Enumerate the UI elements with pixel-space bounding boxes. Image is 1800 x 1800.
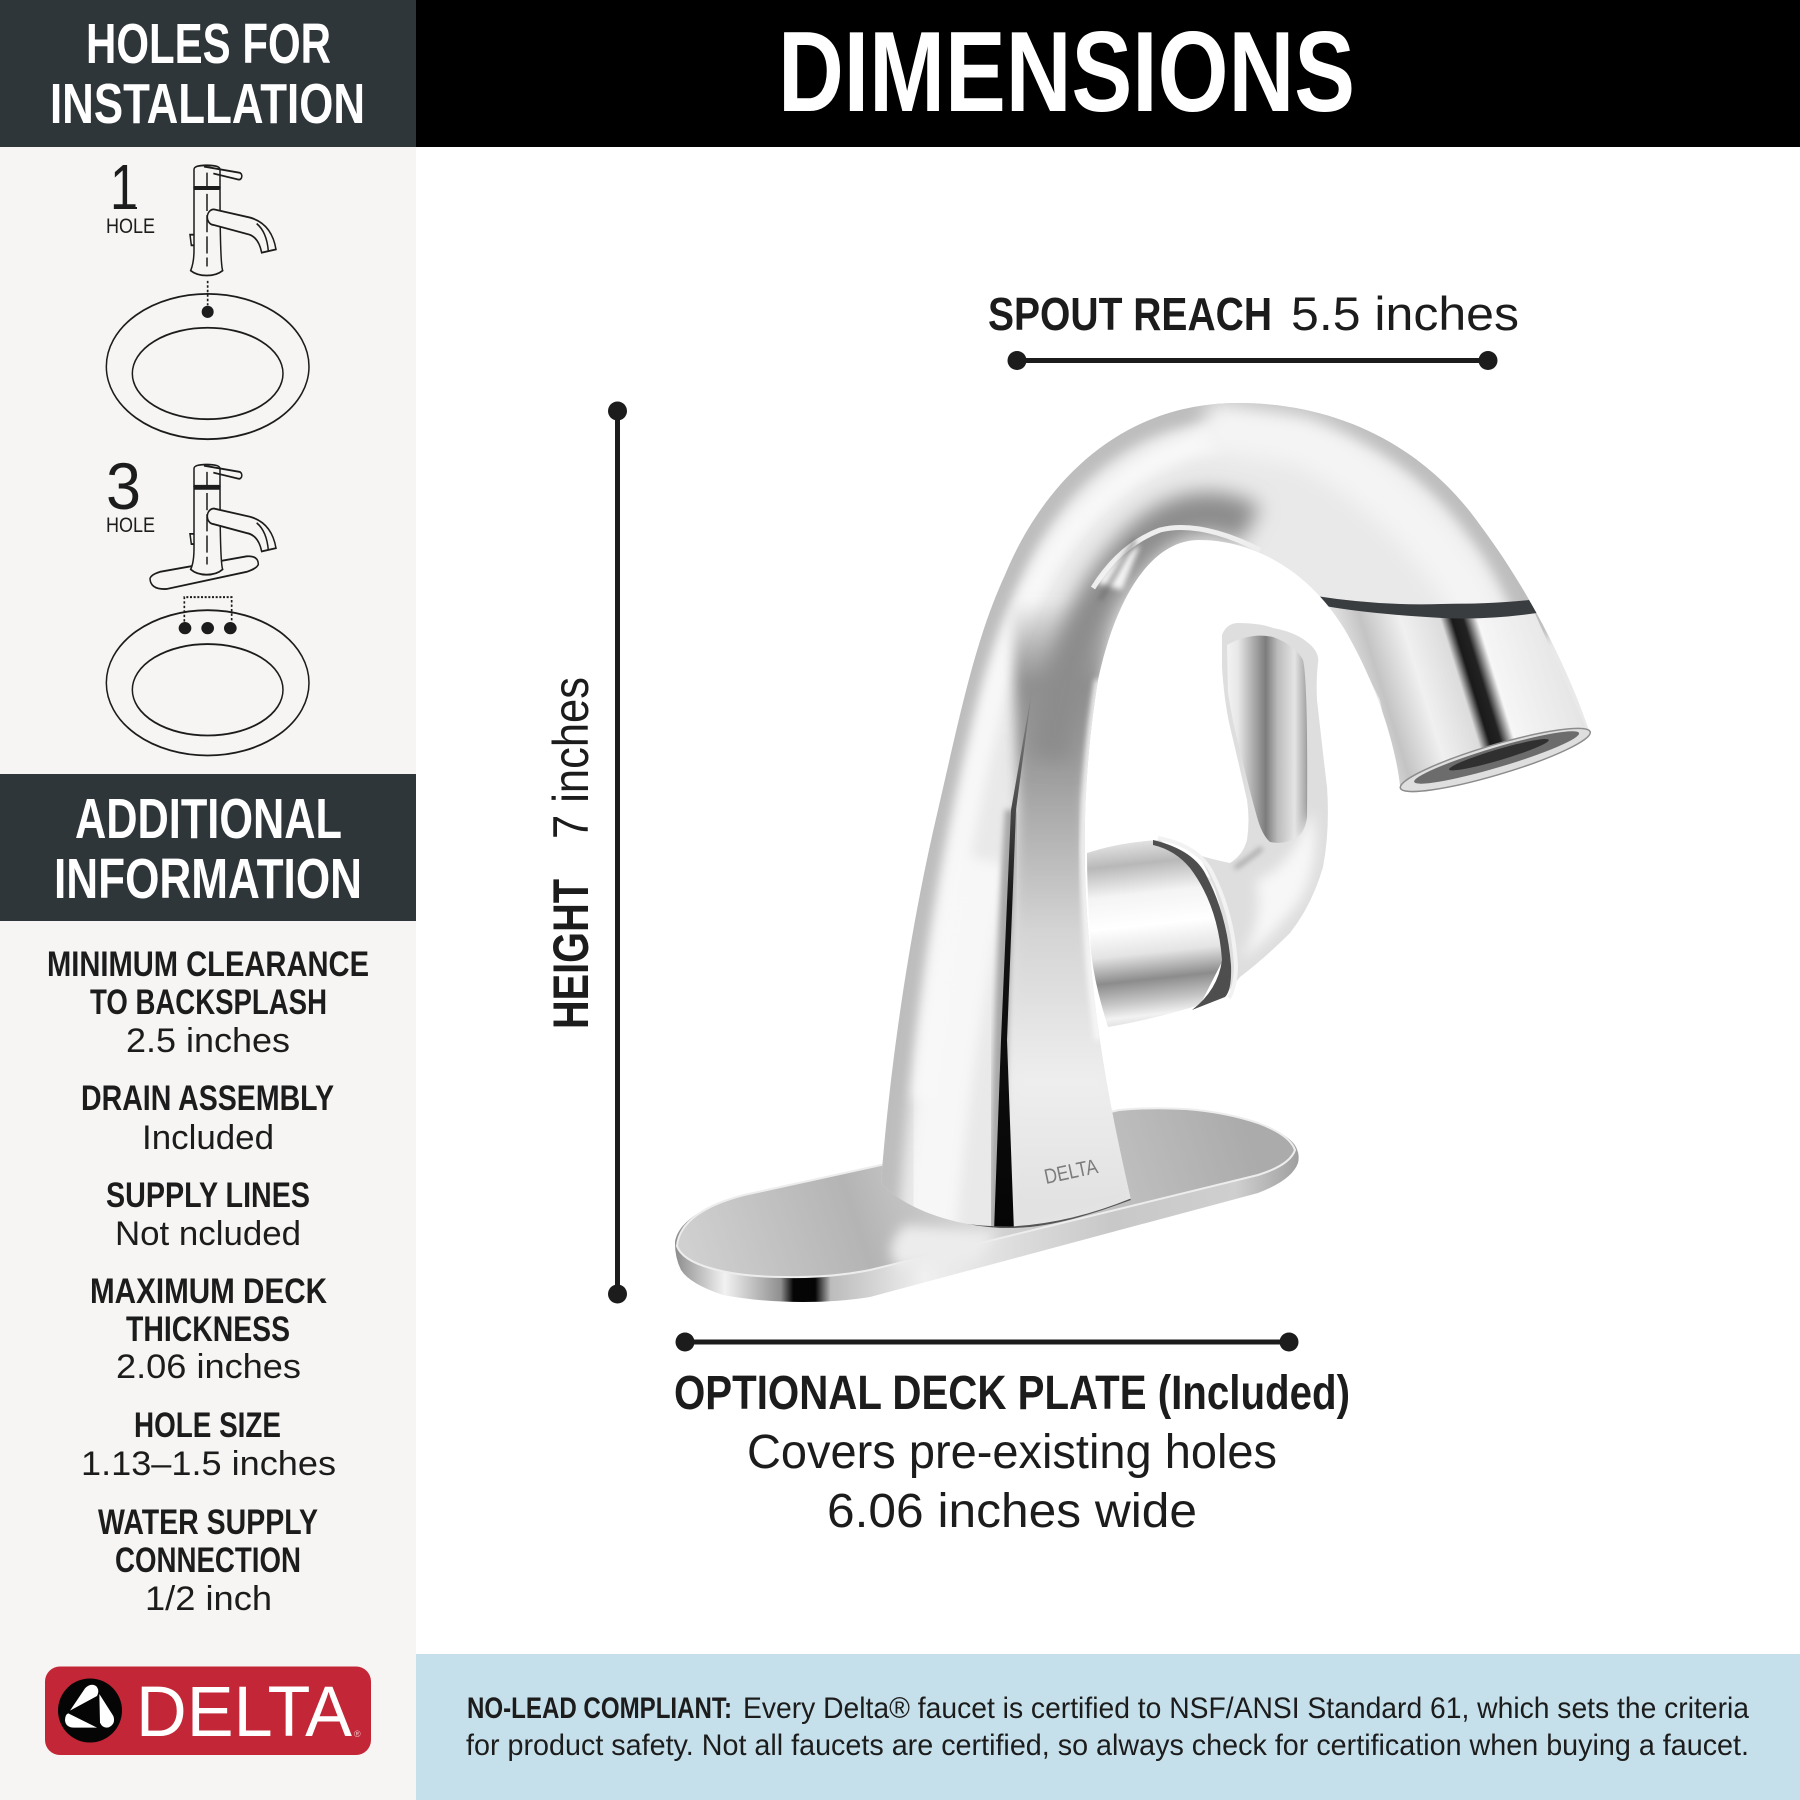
- panel: left sidebar: [0, 0, 416, 1800]
- faucet body and spout: [870, 395, 1600, 1245]
- heading: holes for installation: [0, 0, 416, 147]
- dimension: spout reach: 5.5 inches: [1291, 287, 1519, 340]
- heading: holes for installation: HOLES FOR: [86, 12, 331, 76]
- faucet product image: [675, 395, 1600, 1302]
- label: 1 hole: [106, 151, 155, 238]
- faucet, deck plate and sink line drawing: [106, 464, 309, 756]
- handle cylinder: [1087, 840, 1228, 1027]
- text block: minimum clearance: [47, 945, 369, 1060]
- logo: Delta: ®: [354, 1729, 361, 1739]
- label: 3 hole: 3: [106, 449, 141, 523]
- callout: no-lead compliant: [416, 1654, 1800, 1800]
- text block: minimum clearance: TO BACKSPLASH: [90, 983, 327, 1022]
- text block: drain assembly: Included: [142, 1119, 274, 1157]
- handle lever: [1198, 623, 1328, 994]
- dimension: deck plate: 6.06 inches wide: [827, 1485, 1197, 1538]
- text block: hole size: 1.13–1.5 inches: [81, 1445, 336, 1483]
- label: 1 hole: 1: [110, 151, 138, 223]
- heading: holes for installation: INSTALLATION: [50, 72, 365, 136]
- text block: drain assembly: DRAIN ASSEMBLY: [81, 1079, 334, 1118]
- text block: water supply connection: 1/2 inch: [145, 1580, 272, 1618]
- icon: 3 hole installation: [106, 449, 309, 756]
- label: 3 hole: HOLE: [106, 514, 155, 537]
- dimension: height: 7 inches: [543, 677, 599, 839]
- text block: minimum clearance: 2.5 inches: [126, 1022, 290, 1060]
- title: DIMENSIONS: [778, 9, 1355, 136]
- callout: no-lead compliant: Every Delta® faucet is certified to NSF/ANSI Standard 61, which sets the criteria: [743, 1692, 1749, 1725]
- text block: water supply connection: CONNECTION: [115, 1541, 301, 1580]
- text block: supply lines: SUPPLY LINES: [106, 1176, 310, 1215]
- text block: minimum clearance: MINIMUM CLEARANCE: [47, 945, 369, 984]
- text block: maximum deck thickness: THICKNESS: [126, 1310, 290, 1349]
- callout: no-lead compliant: NO-LEAD COMPLIANT:: [467, 1692, 732, 1725]
- callout: no-lead compliant: for product safety. Not all faucets are certified, so always check for certification when buying a faucet.: [466, 1729, 1749, 1762]
- dimension: height: HEIGHT: [543, 879, 599, 1029]
- dimension: height: [543, 402, 627, 1304]
- text block: water supply connection: WATER SUPPLY: [98, 1503, 318, 1542]
- text block: supply lines: Not ncluded: [115, 1215, 301, 1253]
- dimension: deck plate: [674, 1332, 1350, 1538]
- dimension: deck plate: OPTIONAL DECK PLATE (Included): [674, 1367, 1350, 1420]
- dimension: deck plate: Covers pre-existing holes: [747, 1426, 1277, 1479]
- icon: 1 hole installation: [106, 151, 309, 439]
- text block: maximum deck thickness: [90, 1272, 327, 1386]
- heading: additional information: INFORMATION: [54, 847, 362, 911]
- logo: Delta: [45, 1666, 371, 1755]
- text block: maximum deck thickness: MAXIMUM DECK: [90, 1272, 327, 1311]
- heading: additional information: [0, 774, 416, 921]
- panel: title bar: [416, 0, 1800, 147]
- deck plate: [675, 1108, 1299, 1302]
- text block: drain assembly: [81, 1079, 334, 1157]
- logo: Delta: DELTA: [136, 1673, 353, 1752]
- text block: maximum deck thickness: 2.06 inches: [116, 1348, 301, 1386]
- faucet brand mark: DELTA: [1042, 1155, 1100, 1189]
- label: 3 hole: [106, 449, 155, 537]
- heading: additional information: ADDITIONAL: [75, 787, 342, 851]
- faucet and sink line drawing: [106, 165, 309, 439]
- text block: supply lines: [106, 1176, 310, 1253]
- text block: hole size: [81, 1406, 336, 1483]
- text block: water supply connection: [98, 1503, 318, 1618]
- dimension: spout reach: [988, 287, 1519, 370]
- dimension: spout reach: SPOUT REACH: [988, 288, 1272, 340]
- mouth of spout: [1396, 717, 1594, 802]
- text block: hole size: HOLE SIZE: [134, 1406, 281, 1445]
- handle ring: [1153, 838, 1236, 1010]
- label: 1 hole: HOLE: [106, 215, 155, 238]
